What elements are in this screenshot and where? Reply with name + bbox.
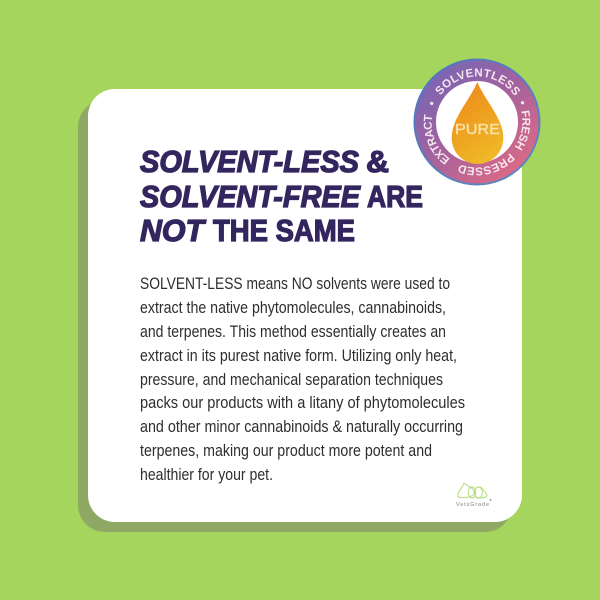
body text: pressure, and mechanical separation techniques — [140, 371, 443, 389]
badge: solventless pure — [414, 58, 540, 186]
logo: VetsGrade — [456, 483, 491, 508]
title: SOLVENT-LESS — [140, 144, 359, 179]
title: NOT — [140, 213, 207, 248]
badge ring text: SOLVENTLESS • FRESH PRESSEDEXTRACT• — [424, 68, 530, 176]
body text: extract the native phytomolecules, cannabinoids, — [140, 299, 446, 317]
title: THE SAME — [213, 213, 355, 248]
logo wordmark: VetsGrade — [456, 502, 489, 508]
title — [140, 144, 423, 248]
body text: packs our products with a litany of phytomolecules — [140, 394, 465, 412]
title: ARE — [367, 179, 423, 214]
white card panel — [88, 89, 522, 522]
body text: extract in its purest native form. Utilizing only heat, — [140, 347, 457, 365]
body text: terpenes, making our product more potent and — [140, 442, 432, 460]
logo icon: cat and dog outline — [458, 483, 487, 498]
body text: and other minor cannabinoids & naturally occurring — [140, 418, 463, 436]
title: SOLVENT-FREE — [140, 179, 361, 214]
icon: orange drop — [452, 82, 503, 164]
title: & — [366, 144, 389, 179]
body text: healthier for your pet. — [140, 466, 273, 484]
drop label: PURE — [455, 121, 500, 138]
body text: SOLVENT-LESS means NO solvents were used to — [140, 275, 450, 293]
body text: and terpenes. This method essentially creates an — [140, 323, 446, 341]
body text — [140, 275, 465, 484]
card shadow — [78, 100, 512, 532]
registered mark — [490, 499, 491, 501]
